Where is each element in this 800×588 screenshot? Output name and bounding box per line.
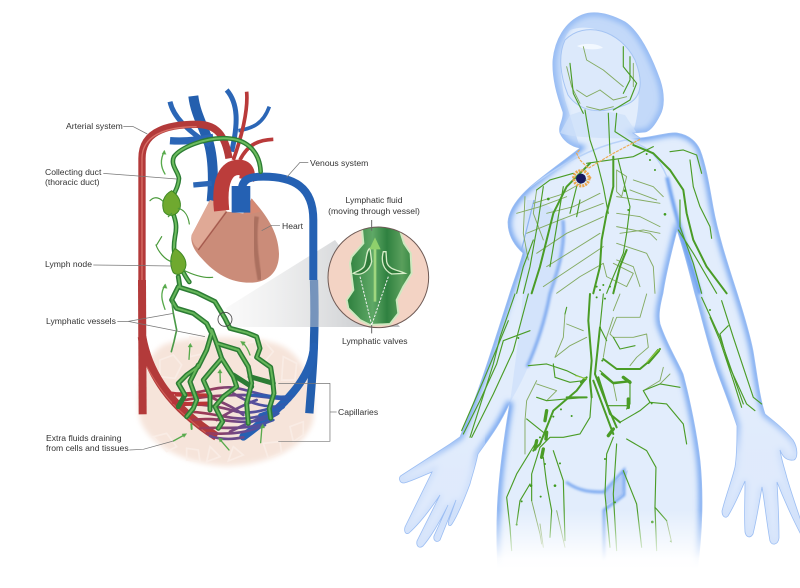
lower body lymph vessels [462, 294, 762, 551]
label: Venous system: Venous system [310, 158, 368, 168]
label: Collecting duct: (thoracic duct) [45, 177, 100, 187]
panel: lymphatic circulation diagram [45, 90, 429, 466]
body silhouette [395, 13, 800, 572]
inset: lymphatic valve magnified [328, 220, 429, 333]
panel: translucent female body with lymphatic network [395, 13, 800, 588]
label: Lymphatic fluid: Lymphatic fluid [345, 195, 403, 205]
shaded zoom projection to inset [226, 240, 400, 327]
label: Arterial system: Arterial system [66, 121, 123, 131]
label: Extra fluids: Extra fluids draining [46, 433, 121, 443]
bottom fade to white [480, 510, 720, 588]
hair [553, 13, 663, 148]
label: Lymphatic valves: Lymphatic valves [342, 336, 408, 346]
face [561, 30, 640, 111]
blue venous system [170, 90, 314, 413]
label: Capillaries: Capillaries [338, 407, 378, 417]
leader lines [93, 127, 337, 450]
label: Lymphatic vessels: Lymphatic vessels [46, 316, 116, 326]
upper body lymph vessels [517, 47, 727, 293]
necklace with pendant [574, 139, 640, 186]
arm overlap bands [510, 200, 563, 402]
pale hands [400, 431, 485, 547]
green flow arrows [161, 150, 265, 450]
label: Lymph node: Lymph node [45, 259, 92, 269]
red arterial system [142, 92, 273, 437]
green lymphatic vessels [171, 277, 274, 428]
label: Heart: Heart [282, 221, 304, 231]
thoracic duct and lymph nodes [150, 138, 261, 282]
aortic arch and superior vena cava root [221, 167, 313, 280]
label: Extra fluids: from cells and tissues [46, 443, 129, 453]
lower venous branch and capillary bed [170, 347, 314, 439]
lymph node lower [171, 248, 186, 274]
tissue: cells and tissues background [139, 337, 314, 466]
lymph node upper [163, 191, 180, 215]
label: Lymphatic fluid: (moving through vessel) [328, 206, 420, 216]
label: Collecting duct: Collecting duct [45, 167, 101, 177]
heart [191, 167, 313, 283]
